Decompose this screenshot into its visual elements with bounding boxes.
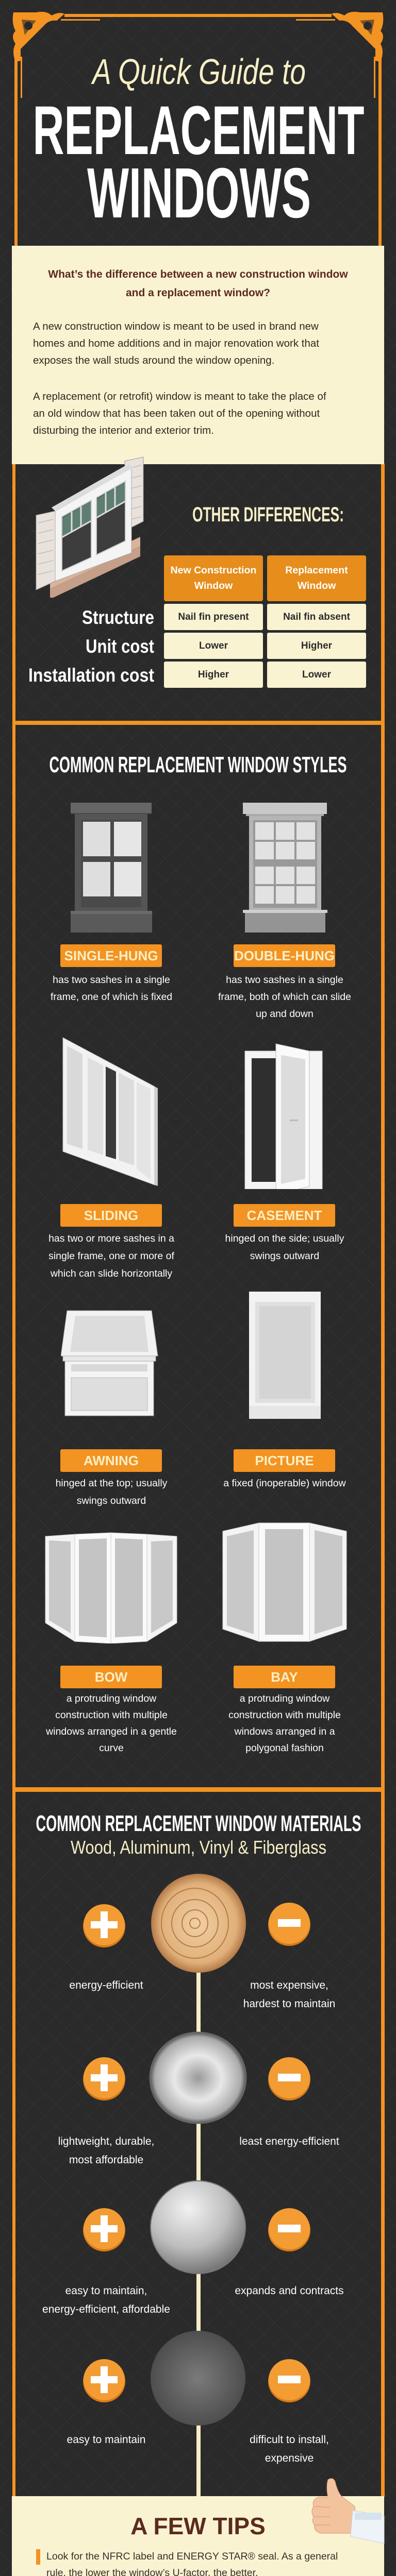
title frame with ornaments [12,11,384,246]
comparison table: Lower [302,669,331,680]
comparison table: Higher [301,640,332,651]
fiberglass [151,2331,245,2426]
table header: New Construction [171,565,256,576]
comparison table: Replacement [285,565,348,576]
desc: sliding: single frame, one or more of [48,1250,174,1262]
label: single-hung [60,944,162,967]
text: most expensive, [250,1979,328,1991]
icon: sliding window [63,1037,158,1186]
icon: double-hung window [243,803,327,933]
desc: casement: swings outward [250,1250,319,1262]
desc: double-hung [218,974,351,1020]
icon: bow window [45,1532,177,1643]
desc: double-hung: has two sashes in a single [226,974,343,986]
label: casement: CASEMENT [247,1208,322,1223]
desc: casement: hinged on the side; usually [225,1233,344,1244]
icon: awning window [61,1311,158,1416]
label: awning [60,1449,162,1472]
wood [151,1874,246,1973]
materials text: fiberglass: easy to maintain [67,2434,145,2446]
question heading: What’s the difference between a new construction window [48,268,348,280]
desc: bow [46,1693,177,1754]
desc: sliding: which can slide horizontally [51,1268,172,1279]
tips heading: A FEW TIPS [130,2513,266,2539]
desc: bow: construction with multiple [55,1709,168,1721]
comparison table: Higher [198,669,229,680]
label: bay [234,1666,335,1688]
desc: bay: windows arranged in a [234,1726,335,1737]
desc: bow: windows arranged in a gentle [46,1726,177,1737]
desc: double-hung: up and down [256,1008,314,1020]
label: picture [234,1449,335,1472]
desc: bay: polygonal fashion [245,1742,324,1754]
intro text: A replacement (or retrofit) window is meant to take the place of [33,391,326,402]
icon: thumbs up hand [311,2478,385,2544]
materials text: vinyl: easy to maintain, [65,2285,147,2297]
label: single-hung: SINGLE-HUNG [64,948,158,963]
materials text: aluminum: most affordable [69,2154,143,2166]
desc: sliding: has two or more sashes in a [48,1233,174,1244]
desc: single-hung [51,974,172,1003]
label: double-hung: DOUBLE-HUNG [234,948,335,963]
materials text: vinyl: energy-efficient, affordable [42,2303,170,2315]
intro text [33,320,326,436]
desc: single-hung: frame, one of which is fixed [51,991,172,1003]
question heading [48,268,348,299]
label: picture: PICTURE [255,1453,314,1468]
table cells: Nail fin present [178,612,249,622]
intro text: homes and home additions and in major renovation work that [33,337,319,349]
materials heading [36,1811,361,1857]
intro text: A new construction window is meant to be used in brand new [33,320,319,332]
illustration: window with shutters [36,456,143,598]
label: bow: BOW [95,1669,127,1685]
title [33,52,364,233]
table header [164,555,263,601]
question heading: and a replacement window? [126,287,270,299]
materials text: wood: energy-efficient [69,1979,143,1991]
comparison table: Nail fin absent [283,612,350,622]
label: sliding: SLIDING [84,1208,138,1223]
table header: Window [194,580,233,591]
orange bordered content frame [12,464,385,2497]
tip 1: Look for the NFRC label and ENERGY STAR® seal. As a general [46,2551,338,2562]
tip 1 [36,2549,338,2576]
intro text: an old window that has been taken out of the opening without [33,408,320,419]
label: sliding [60,1204,162,1227]
title: A Quick Guide to [91,52,306,92]
icon: single-hung window [71,803,152,933]
text: hardest to maintain [243,1998,335,2010]
aluminum [150,2032,246,2123]
comparison table [28,555,366,688]
vinyl [151,2181,245,2274]
comparison table: Lower [199,640,228,651]
materials rows: plus/minus icons and discs [83,1874,310,2426]
label: bay: BAY [271,1669,298,1685]
desc: bay: construction with multiple [228,1709,341,1721]
materials text: aluminum [58,2136,154,2166]
desc: picture: a fixed (inoperable) window [223,1478,346,1489]
intro panel [12,246,384,464]
desc: bay: a protruding window [240,1693,329,1704]
text: difficult to install, [250,2434,329,2446]
desc: sliding [48,1233,174,1279]
icon: bay window [223,1522,346,1642]
desc: double-hung: frame, both of which can slide [218,991,351,1003]
desc: bow: curve [99,1742,124,1754]
desc: casement [225,1233,344,1262]
timeline line [196,1927,201,2497]
label: awning: AWNING [84,1453,139,1468]
label: bow [60,1666,162,1688]
text: least energy-efficient [239,2136,339,2147]
label: double-hung [234,944,335,967]
icon: casement window [244,1043,323,1189]
intro text: disturbing the interior and exterior trim. [33,425,214,436]
desc: bay [228,1693,341,1754]
intro text: exposes the wall studs around the window opening. [33,354,274,366]
table cells [164,604,263,630]
tips panel [12,2496,384,2576]
desc: awning [56,1478,167,1506]
desc: bow: a protruding window [67,1693,156,1704]
materials text: aluminum: lightweight, durable, [58,2136,154,2147]
text: expensive [265,2452,314,2464]
desc: awning: hinged at the top; usually [56,1478,167,1489]
desc: single-hung: has two sashes in a single [53,974,170,986]
text: expands and contracts [235,2285,344,2297]
label: casement [234,1204,335,1227]
desc: awning: swings outward [77,1495,146,1506]
materials text: vinyl [42,2285,170,2315]
row labels [28,607,154,686]
comparison table: Window [298,580,336,591]
icon: picture window [249,1292,321,1419]
